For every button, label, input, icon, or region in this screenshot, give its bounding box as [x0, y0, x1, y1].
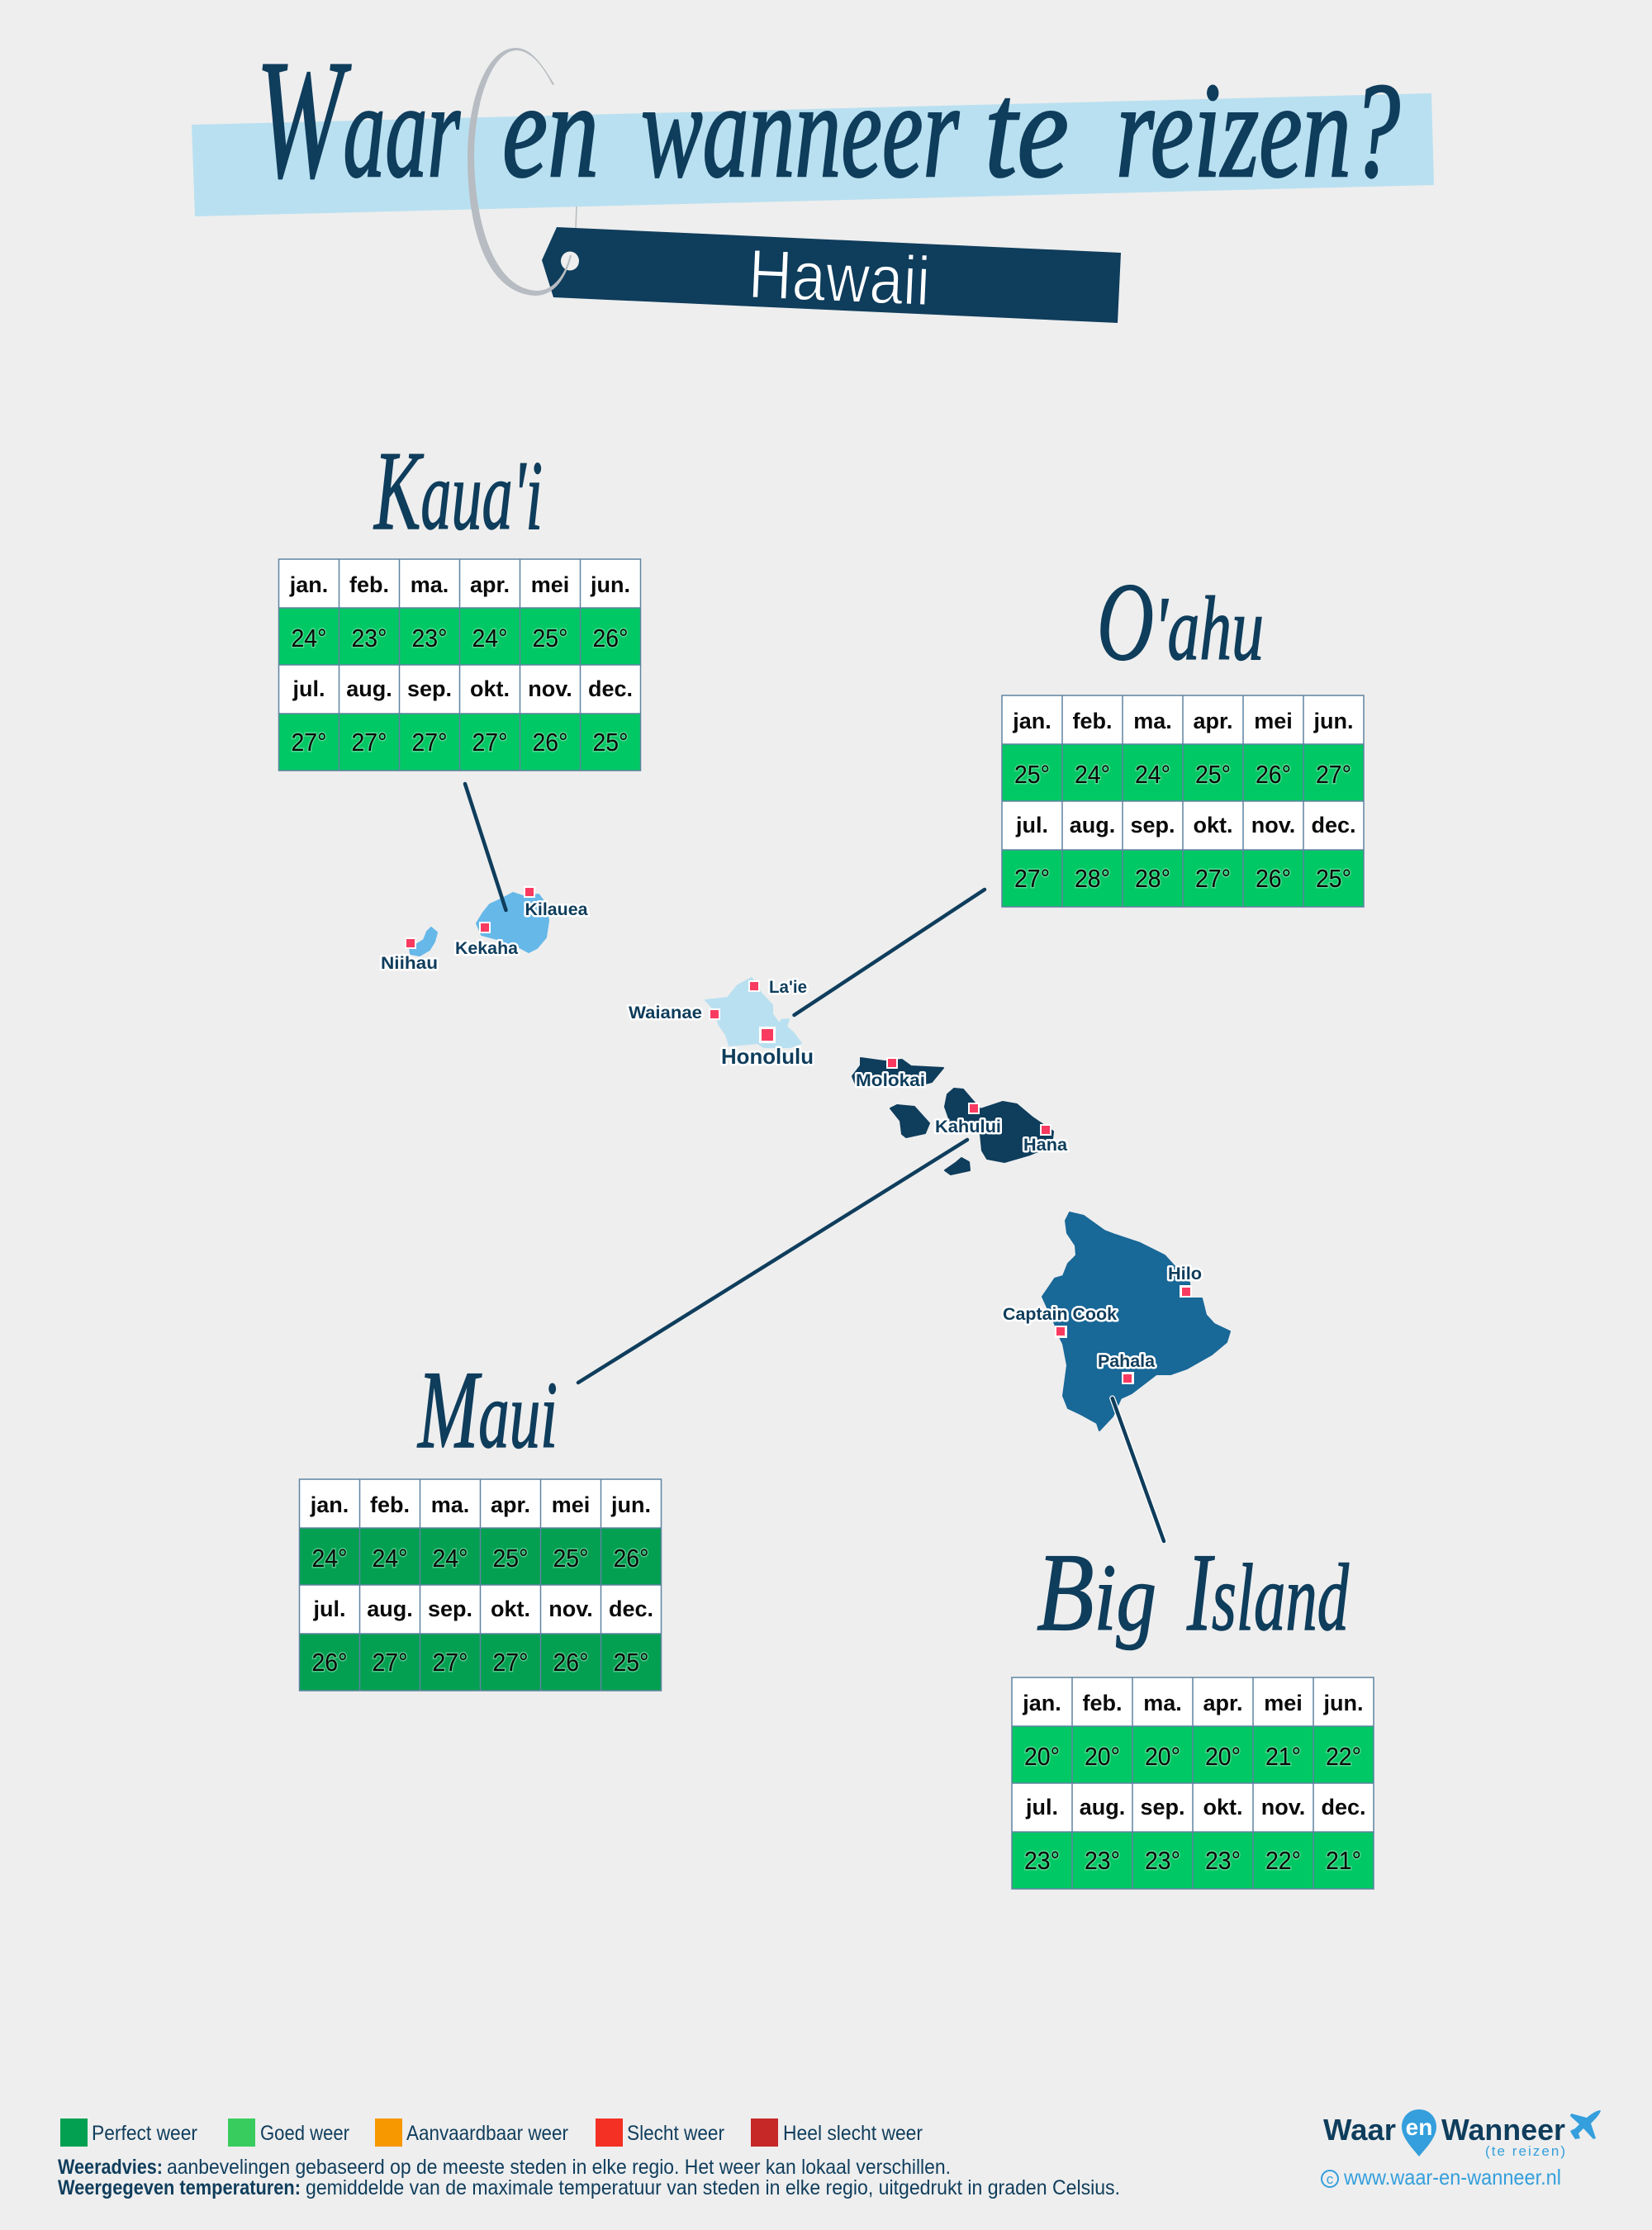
panel: Maui climate table: sep.: [428, 1597, 472, 1621]
heading: O'ahu: O'ahu: [1097, 561, 1264, 684]
panel: Big Island climate table: 20°: [1024, 1742, 1060, 1771]
panel: Kaua'i climate table: sep.: [407, 676, 452, 701]
region name: Hawaii: [747, 235, 932, 320]
heading: Big Island: Island: [1186, 1531, 1349, 1654]
panel: Big Island climate table: mei: [1264, 1691, 1303, 1715]
panel: Kaua'i climate table: nov.: [528, 676, 572, 701]
connector line: Big Island: [1113, 1398, 1164, 1541]
panel: Big Island climate table: 20°: [1145, 1742, 1180, 1771]
city labels: Niihau: [381, 954, 438, 973]
panel: Maui climate table: mei: [552, 1492, 590, 1517]
city labels: [381, 900, 1202, 1371]
panel: O'ahu climate table: 25°: [1316, 864, 1351, 893]
panel: Maui climate table: 26°: [553, 1648, 588, 1677]
temperature note: gemiddelde van de maximale temperatuur van steden in elke regio, uitgedrukt in graden Celsius.: [306, 2176, 1120, 2199]
legend item: very bad weather: [751, 2118, 923, 2147]
panel: Maui climate table: dec.: [609, 1597, 653, 1621]
panel: O'ahu climate table: jan.: [1012, 709, 1051, 733]
panel: Big Island climate table: dec.: [1321, 1795, 1366, 1820]
logo: [1322, 2109, 1601, 2190]
logo: (te reizen): [1485, 2143, 1565, 2159]
panel: Kaua'i climate table: 24°: [291, 624, 327, 652]
panel: Kaua'i climate table: jan.: [289, 572, 328, 597]
panel: Big Island climate table: 21°: [1326, 1846, 1361, 1875]
panel: Maui climate table: okt.: [491, 1597, 530, 1621]
logo: Wanneer: [1441, 2113, 1565, 2147]
panel: O'ahu climate table: 25°: [1014, 760, 1050, 789]
panel: Kaua'i climate table: 23°: [411, 624, 448, 652]
panel: Maui climate table: 26°: [312, 1648, 347, 1677]
panel: Big Island climate table: 23°: [1085, 1846, 1120, 1875]
legend item: bad weather: [596, 2118, 724, 2147]
panel: Big Island climate table: 20°: [1205, 1742, 1241, 1771]
map: Hawaiian islands: [410, 893, 1230, 1431]
panel: O'ahu climate table: aug.: [1070, 813, 1115, 837]
city labels: Pahala: [1098, 1352, 1155, 1371]
panel: Kaua'i climate table: 27°: [472, 728, 507, 757]
panel: Kaua'i climate table: 27°: [352, 728, 387, 757]
panel: Big Island climate table: feb.: [1082, 1691, 1123, 1715]
panel: Big Island climate table: 23°: [1024, 1846, 1060, 1875]
connector line: Maui: [578, 1140, 967, 1383]
city labels: Waianae: [629, 1004, 702, 1022]
panel: Kaua'i climate table: aug.: [346, 676, 392, 701]
panel: O'ahu climate table: apr.: [1193, 709, 1233, 733]
legend item: very bad weather: Heel slecht weer: [783, 2122, 923, 2145]
panel: O'ahu climate table: 27°: [1195, 864, 1231, 893]
panel: O'ahu climate table: dec.: [1311, 813, 1356, 837]
panel: Big Island climate table: ma.: [1143, 1691, 1182, 1715]
panel: Kaua'i climate table: 24°: [472, 624, 507, 652]
panel: Maui climate table: 27°: [492, 1648, 529, 1677]
title: reizen?: [1116, 55, 1400, 206]
connector line: O'ahu: [795, 890, 985, 1015]
title: te: [985, 55, 1069, 206]
panel: Maui climate table: nov.: [548, 1597, 593, 1621]
panel: Maui climate table: 27°: [433, 1648, 468, 1677]
panel: Kaua'i climate table: 25°: [593, 728, 628, 757]
legend item: good weather: Goed weer: [260, 2122, 349, 2145]
panel: Big Island climate table: jun.: [1323, 1691, 1363, 1715]
city labels: Kekaha: [455, 939, 518, 958]
legend: [60, 2118, 923, 2147]
legend item: bad weather: Slecht weer: [627, 2122, 724, 2145]
tag string loop: [468, 48, 572, 296]
island: O'ahu: [705, 978, 801, 1047]
city labels: Molokai: [856, 1071, 925, 1090]
panel: O'ahu climate table: 24°: [1135, 760, 1170, 789]
island: Kahoolawe: [945, 1158, 970, 1174]
panel: O'ahu climate table: ma.: [1133, 709, 1172, 733]
panel: Maui climate table: 25°: [553, 1544, 588, 1573]
island: Big Island: [1042, 1212, 1230, 1431]
panel: O'ahu climate table: jul.: [1015, 813, 1048, 837]
region tag: [542, 227, 1121, 323]
legend item: perfect weather: Perfect weer: [92, 2122, 197, 2145]
panel: Big Island climate table: jul.: [1025, 1795, 1058, 1820]
panel: Maui climate table: [299, 1479, 661, 1691]
panel: Maui climate table: 24°: [312, 1544, 347, 1573]
heading: Big Island: Big: [1037, 1531, 1156, 1654]
panel: Maui climate table: ma.: [431, 1492, 469, 1517]
panel: Kaua'i climate table: 27°: [411, 728, 448, 757]
panel: Maui climate table: jan.: [310, 1492, 349, 1517]
panel: Big Island climate table: apr.: [1203, 1691, 1243, 1715]
panel: Kaua'i climate table: 26°: [532, 728, 568, 757]
panel: Kaua'i climate table: dec.: [588, 676, 633, 701]
city labels: Kilauea: [525, 900, 588, 919]
website link: www.waar-en-wanneer.nl: [1343, 2165, 1561, 2190]
panel: Big Island climate table: jan.: [1022, 1691, 1061, 1715]
panel: O'ahu climate table: 26°: [1256, 760, 1291, 789]
panel: Maui climate table: 24°: [372, 1544, 408, 1573]
panel: O'ahu climate table: 27°: [1316, 760, 1351, 789]
panel: Kaua'i climate table: okt.: [470, 676, 510, 701]
panel: Big Island climate table: 22°: [1265, 1846, 1301, 1875]
panel: Maui climate table: 25°: [613, 1648, 649, 1677]
logo: Waar: [1323, 2113, 1396, 2147]
panel: O'ahu climate table: 28°: [1135, 864, 1170, 893]
city labels: Hana: [1023, 1136, 1067, 1155]
panel: O'ahu climate table: 26°: [1256, 864, 1291, 893]
icon: map pin: [1402, 2109, 1436, 2156]
panel: O'ahu climate table: 24°: [1075, 760, 1110, 789]
panel: O'ahu climate table: feb.: [1072, 709, 1113, 733]
panel: Big Island climate table: nov.: [1261, 1795, 1305, 1820]
panel: Kaua'i climate table: apr.: [470, 572, 510, 597]
city markers: [405, 886, 1192, 1384]
legend item: good weather: [228, 2118, 349, 2147]
panel: Big Island climate table: aug.: [1080, 1795, 1125, 1820]
panel: Big Island climate table: 23°: [1205, 1846, 1241, 1875]
panel: O'ahu climate table: nov.: [1251, 813, 1295, 837]
panel: Maui climate table: 24°: [433, 1544, 468, 1573]
panel: Maui climate table: 26°: [613, 1544, 649, 1573]
island: Maui: [945, 1089, 1053, 1162]
panel: Maui climate table: 25°: [492, 1544, 529, 1573]
city labels: Kahului: [935, 1117, 1001, 1136]
legend item: acceptable weather: Aanvaardbaar weer: [406, 2122, 568, 2145]
panel: O'ahu climate table: 28°: [1075, 864, 1110, 893]
tag string thin segment: [576, 206, 577, 229]
island: Molokai: [852, 1058, 943, 1084]
title: [256, 26, 1400, 213]
website link: c: [1327, 2171, 1334, 2187]
panel: Kaua'i climate table: [279, 559, 641, 771]
weather advice note: aanbevelingen gebaseerd op de meeste steden in elke regio. Het weer kan lokaal verschillen.: [167, 2156, 951, 2179]
connector line: Kaua'i: [465, 784, 506, 910]
panel: Maui climate table: feb.: [370, 1492, 410, 1517]
logo: en: [1406, 2114, 1432, 2140]
panel: Kaua'i climate table: ma.: [411, 572, 449, 597]
island: Lanai: [890, 1105, 929, 1137]
panel: O'ahu climate table: jun.: [1313, 709, 1353, 733]
panel: Big Island climate table: sep.: [1140, 1795, 1185, 1820]
legend item: perfect weather: [60, 2118, 197, 2147]
city labels: Hilo: [1168, 1264, 1202, 1283]
panel: Big Island climate table: 22°: [1326, 1742, 1361, 1771]
panel: Big Island climate table: 23°: [1145, 1846, 1180, 1875]
legend item: acceptable weather: [375, 2118, 568, 2147]
title: en: [502, 55, 599, 206]
island: Kaua'i: [477, 893, 548, 952]
panel: O'ahu climate table: okt.: [1193, 813, 1233, 837]
city labels: Captain Cook: [1003, 1305, 1117, 1324]
panel: Big Island climate table: okt.: [1203, 1795, 1243, 1820]
panel: Maui climate table: jun.: [610, 1492, 651, 1517]
title: Waar: [256, 26, 460, 213]
panel: Big Island climate table: 20°: [1085, 1742, 1120, 1771]
panel: O'ahu climate table: mei: [1254, 709, 1293, 733]
panel: Kaua'i climate table: 25°: [532, 624, 568, 652]
panel: Kaua'i climate table: 27°: [291, 728, 327, 757]
panel: Maui climate table: 27°: [372, 1648, 408, 1677]
title: wanneer: [641, 55, 960, 206]
island: Niihau: [410, 928, 437, 956]
weather advice note: Weeradvies:: [58, 2156, 163, 2179]
panel: Maui climate table: jul.: [312, 1597, 345, 1621]
panel: Big Island climate table: [1012, 1677, 1374, 1889]
heading: Big Island: [1037, 1531, 1349, 1654]
panel: Big Island climate table: 21°: [1265, 1742, 1301, 1771]
panel: Kaua'i climate table: jun.: [590, 572, 630, 597]
panel: Maui climate table: apr.: [491, 1492, 530, 1517]
city labels: La'ie: [769, 978, 807, 997]
panel: Kaua'i climate table: 26°: [593, 624, 628, 652]
icon: airplane: [1570, 2110, 1601, 2139]
temperature note: Weergegeven temperaturen:: [58, 2176, 301, 2199]
panel: O'ahu climate table: sep.: [1130, 813, 1175, 837]
panel: O'ahu climate table: 27°: [1014, 864, 1050, 893]
panel: Kaua'i climate table: mei: [531, 572, 569, 597]
panel: Kaua'i climate table: jul.: [292, 676, 325, 701]
panel: Maui climate table: aug.: [367, 1597, 413, 1621]
panel: Kaua'i climate table: 23°: [352, 624, 387, 652]
title banner: [192, 93, 1434, 216]
panel: Kaua'i climate table: feb.: [349, 572, 389, 597]
heading: Kaua'i: Kaua'i: [373, 428, 543, 553]
city labels: Honolulu: [721, 1044, 814, 1069]
panel: O'ahu climate table: 25°: [1195, 760, 1231, 789]
panel: O'ahu climate table: [1002, 695, 1364, 907]
heading: Maui: Maui: [417, 1349, 558, 1472]
